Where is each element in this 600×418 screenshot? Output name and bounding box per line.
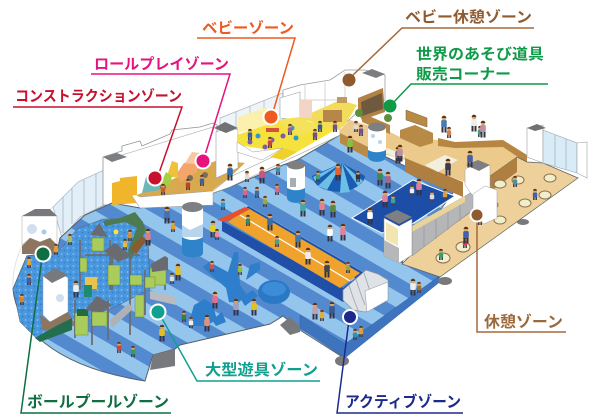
label: baby zone	[197, 19, 295, 124]
white pillar	[214, 122, 238, 178]
dark blue mat	[352, 180, 455, 233]
label: ball pool zone: ボールプールゾーン	[27, 393, 169, 411]
label: world toy sales corner: 世界のあそび道具	[416, 46, 544, 63]
cylinder 3	[368, 122, 386, 162]
ball pool pillars	[22, 209, 75, 342]
baby rest room	[300, 97, 357, 130]
label: construction zone: コンストラクションゾーン	[15, 88, 182, 105]
panel: cafe floor	[402, 157, 578, 277]
label: active zone	[337, 310, 463, 413]
cylinder 1	[182, 202, 203, 258]
right glass wall	[527, 124, 587, 178]
label: construction zone	[13, 88, 182, 186]
label: active zone: アクティブゾーン	[345, 392, 461, 411]
label: role play zone: ロールプレイゾーン	[94, 56, 229, 73]
tunnel	[343, 270, 388, 312]
label: world toy sales corner: 販売コーナー	[416, 66, 511, 83]
blue dome	[312, 163, 365, 193]
air mat	[217, 206, 366, 302]
ball pit circle	[258, 280, 290, 304]
blue play tree	[188, 252, 260, 326]
label: large play equipment zone	[150, 304, 320, 381]
panel: tan shop floor	[340, 110, 527, 197]
panel: construction and role play floor	[112, 127, 340, 208]
people	[20, 115, 537, 357]
label: rest zone: 休憩ゾーン	[484, 312, 563, 331]
label: large play equipment zone: 大型遊具ゾーン	[205, 360, 318, 379]
floor feet	[150, 219, 529, 370]
cylinder 2	[287, 160, 305, 203]
shelves and sales corner	[355, 88, 392, 122]
label: world toy sales corner	[384, 46, 548, 112]
label: baby rest zone	[342, 8, 534, 86]
panel: baby zone floor	[237, 92, 340, 160]
label: baby zone: ベビーゾーン	[202, 19, 294, 37]
white pillars, right group	[384, 160, 497, 263]
grey counter wall	[412, 180, 490, 256]
label: baby rest zone: ベビー休憩ゾーン	[405, 8, 532, 26]
faint arc of building outline	[13, 207, 53, 290]
back wall and glazing	[53, 69, 385, 242]
label: ball pool zone	[21, 246, 171, 413]
label: rest zone	[470, 208, 566, 332]
floor: striped blue	[13, 135, 455, 381]
large play structure	[75, 223, 176, 345]
label: role play zone	[91, 56, 230, 168]
panel: ball pool	[13, 212, 150, 339]
